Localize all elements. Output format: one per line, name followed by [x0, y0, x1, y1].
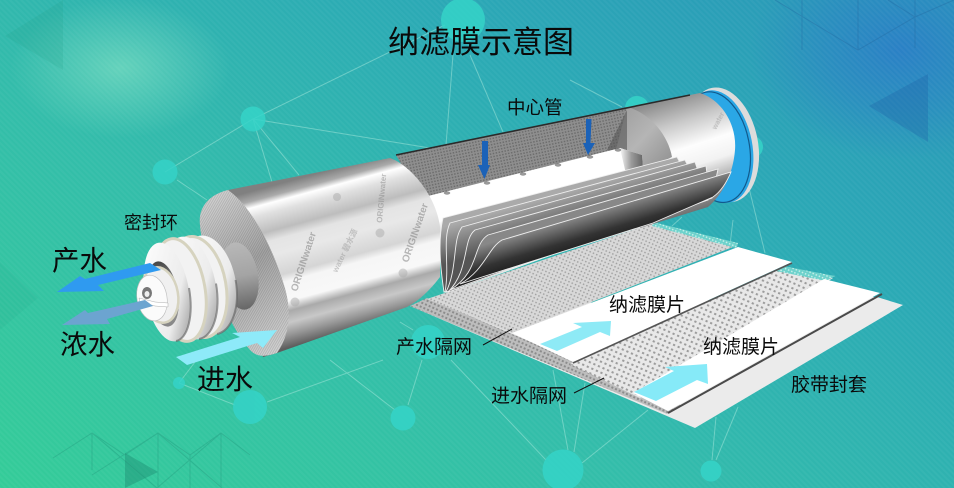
- label: permeate: 产水: [52, 245, 107, 276]
- label: feed water: 进水: [197, 364, 253, 395]
- sheet: upper membrane: [512, 247, 792, 362]
- collar: [216, 239, 264, 313]
- centre tube: [428, 148, 643, 260]
- middle ring: [155, 232, 225, 344]
- label: membrane upper: 纳滤膜片: [609, 294, 685, 316]
- brand marks on casing: [289, 111, 726, 306]
- cap: end ring: [673, 81, 768, 209]
- sheet: tape sleeve: [410, 297, 903, 428]
- seal end fitting: [133, 231, 264, 346]
- arrow: flow into tube left: [478, 141, 490, 179]
- arrow: lower sheet flow: [634, 364, 708, 401]
- layered spacer edge: [410, 298, 680, 414]
- arrow: feed in: [176, 330, 277, 365]
- layered membrane sheets: [410, 222, 903, 428]
- front seal: [146, 234, 214, 346]
- label: centre tube: 中心管: [507, 97, 563, 118]
- label: concentrate: 浓水: [60, 329, 115, 360]
- label: seal ring: 密封环: [124, 213, 178, 233]
- inner seal ring: [137, 264, 183, 326]
- teal mesh edge: permeate spacer: [652, 222, 738, 248]
- left silver section: [228, 158, 440, 357]
- label: feed spacer: 进水隔网: [491, 385, 567, 407]
- front ring: [137, 239, 197, 345]
- rear seal: [162, 232, 234, 342]
- brand marks on casing: water: [711, 111, 726, 132]
- brand marks on casing: ORIGINwater: [375, 173, 388, 223]
- label: tape sleeve: 胶带封套: [791, 374, 867, 396]
- label: permeate spacer: 产水隔网: [396, 336, 472, 358]
- teal mesh edge: feed spacer: [776, 266, 835, 281]
- arrow: permeate out: [57, 263, 161, 292]
- dark moire wedge: [607, 110, 627, 157]
- brand marks on casing: ORIGINwater: [400, 202, 431, 264]
- left end face: [200, 190, 289, 356]
- top dark edge: [396, 95, 690, 155]
- network lines: [165, 25, 765, 463]
- holes on tube: [444, 149, 621, 194]
- sheet: lower membrane: [633, 279, 880, 411]
- arrow: upper sheet flow: [540, 321, 611, 351]
- sheet: permeate spacer: [427, 223, 738, 333]
- rear ring: [172, 231, 244, 339]
- ring shadow arcs: [176, 280, 237, 341]
- fan cut face: [612, 107, 672, 172]
- front bore: [142, 259, 184, 329]
- spiral membrane leaves: [440, 157, 731, 292]
- arrow: flow into tube right: [583, 119, 595, 155]
- filter cartridge cylinder: [133, 81, 768, 357]
- brand marks on casing: ORIGINwater: [289, 231, 319, 293]
- brand marks on casing: water 碧水源: [329, 227, 359, 275]
- cut-away back wall: [396, 107, 627, 215]
- title: 纳滤膜示意图: [388, 25, 574, 60]
- right silver section: [600, 93, 735, 228]
- network nodes: [152, 0, 763, 488]
- centre tube end: [620, 148, 643, 174]
- arrow: concentrate out: [62, 300, 153, 325]
- inner nozzle: [133, 273, 171, 323]
- sheet: feed spacer: [570, 267, 833, 398]
- label: membrane lower: 纳滤膜片: [703, 336, 779, 358]
- leader lines: [483, 329, 604, 393]
